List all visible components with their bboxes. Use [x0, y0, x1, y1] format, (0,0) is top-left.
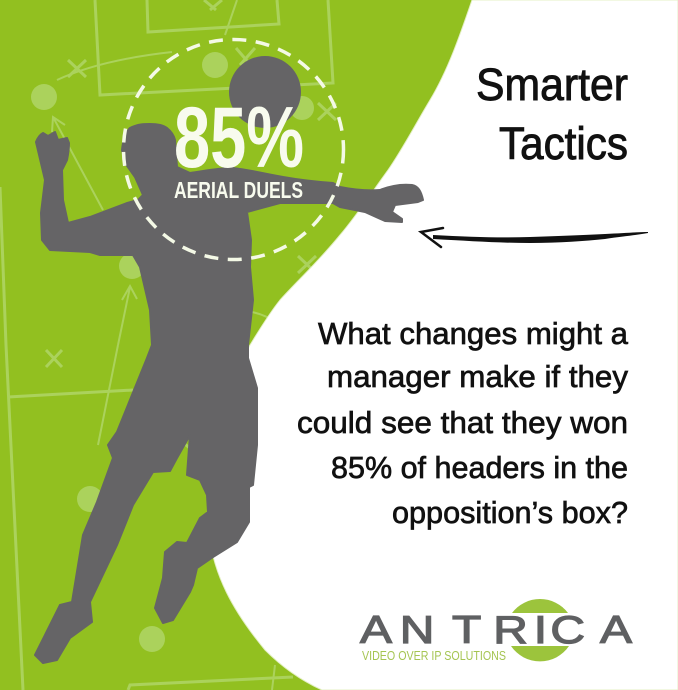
heading: smarter tactics: Smarter	[476, 59, 628, 110]
heading: smarter tactics	[476, 59, 628, 169]
heading: smarter tactics: Tactics	[499, 118, 628, 169]
statistic: 85%: 85%	[174, 90, 304, 186]
tactical pitch diagram	[0, 0, 336, 690]
text block: question: 85% of headers in the	[331, 450, 628, 485]
logo wordmark: ANTRICA	[360, 608, 633, 652]
logo green circle bottom	[511, 646, 569, 661]
text block: question: What changes might a	[318, 316, 629, 351]
logo green circle top	[512, 599, 568, 613]
icon: ball	[229, 56, 301, 128]
callout: dashed circle	[124, 40, 344, 260]
logo: antrica	[360, 599, 633, 663]
text block: question: opposition’s box?	[392, 495, 628, 530]
label: aerial duels: AERIAL DUELS	[174, 177, 303, 203]
text block: question: could see that they won	[297, 405, 628, 440]
text block: question: manager make if they	[327, 359, 628, 394]
icon: hand-drawn arrow	[421, 228, 648, 247]
text block: question	[297, 316, 629, 530]
panel: white curved panel	[208, 0, 678, 690]
player silhouette	[35, 124, 423, 663]
logo tagline: VIDEO OVER IP SOLUTIONS	[362, 649, 506, 663]
